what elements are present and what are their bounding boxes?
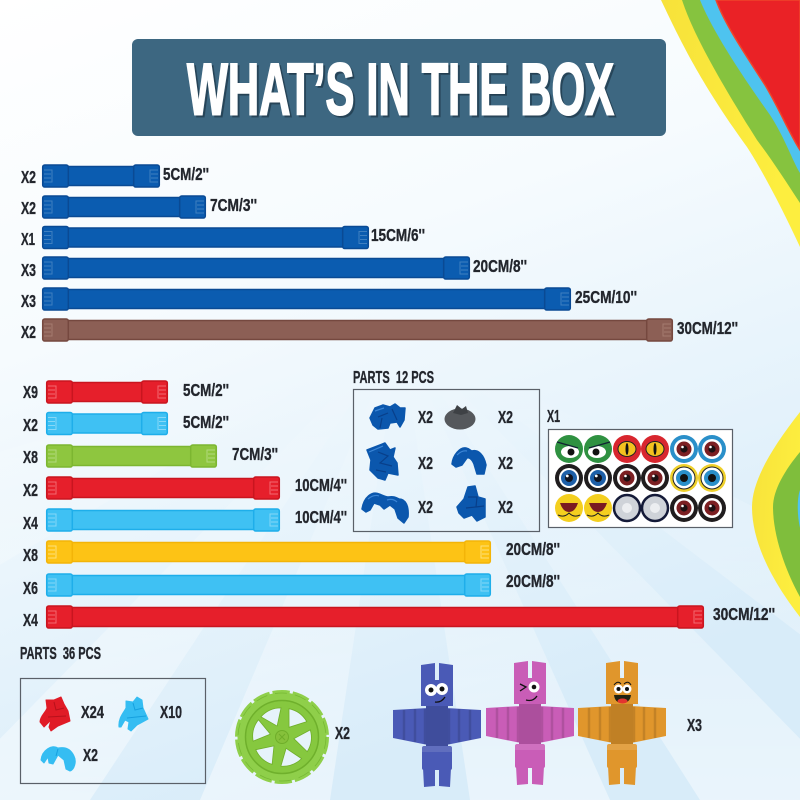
part counts: X2 bbox=[418, 453, 433, 473]
bar row: X1 15cm blue: X1 bbox=[21, 229, 35, 249]
bar row: X3 20cm blue: X3 bbox=[21, 260, 36, 280]
icon: green wheel bbox=[238, 692, 326, 782]
icon: grey round base bbox=[444, 405, 476, 430]
bar row: X9 5cm red: X9 bbox=[23, 382, 38, 402]
bar row: X8 7cm green: 7CM/3'' bbox=[232, 444, 278, 464]
stickers: black ring brown eyes bbox=[670, 494, 726, 522]
bar row: X2 5cm blue: 5CM/2'' bbox=[163, 164, 209, 184]
bar row: X1 15cm blue: 15CM/6'' bbox=[371, 225, 425, 245]
panel: parts 36 pcs bbox=[20, 678, 206, 784]
bar row: X9 5cm red: 5CM/2'' bbox=[183, 380, 229, 400]
bar row: X3 20cm blue bbox=[21, 256, 527, 280]
bar row: X3 25cm blue: X3 bbox=[21, 291, 36, 311]
sticker count: X1 bbox=[547, 406, 560, 426]
stickers: red cat eyes bbox=[613, 435, 669, 463]
figure count: X3 bbox=[687, 715, 702, 735]
bar row: X2 10cm red bbox=[23, 475, 347, 500]
panel: parts 36 pcs: X10 bbox=[160, 702, 182, 722]
part counts: X2 bbox=[498, 407, 513, 427]
icon: blue multi-clip part bbox=[370, 404, 405, 429]
part counts bbox=[418, 407, 513, 517]
panel: parts 12 pcs bbox=[354, 390, 540, 532]
bar row: X2 30cm brown: 30CM/12'' bbox=[677, 318, 738, 338]
bar row: X2 5cm cyan: 5CM/2'' bbox=[183, 412, 229, 432]
stickers: yellow mouths bbox=[555, 494, 612, 522]
heading: parts 12 pcs: PARTS 12 PCS bbox=[353, 367, 434, 387]
stickers: black ring red eyes bbox=[613, 464, 669, 492]
icon: blue double arch bbox=[452, 448, 486, 474]
stickers: blue ring eyes bbox=[670, 435, 726, 463]
bar row: X9 5cm red bbox=[23, 380, 229, 403]
bar row: X8 20cm yellow bbox=[23, 539, 560, 565]
figure: blue robot bbox=[393, 663, 481, 787]
stickers: black ring blue eyes bbox=[555, 464, 612, 492]
stickers: yellow ring blue eyes bbox=[670, 464, 726, 492]
icon: cyan clip bbox=[119, 697, 148, 731]
bar row: X4 10cm cyan: 10CM/4'' bbox=[295, 507, 347, 527]
bar row: X4 10cm cyan bbox=[23, 507, 347, 533]
bar row: X3 25cm blue: 25CM/10'' bbox=[575, 287, 637, 307]
bar row: X2 7cm blue bbox=[21, 195, 257, 218]
bar row: X2 30cm brown bbox=[21, 318, 738, 342]
bar row: X2 30cm brown: X2 bbox=[21, 322, 36, 342]
bar row: X2 5cm cyan bbox=[23, 412, 229, 435]
bar row: X1 15cm blue bbox=[21, 225, 425, 249]
bar row: X8 7cm green bbox=[23, 444, 278, 467]
part counts: X2 bbox=[498, 497, 513, 517]
bar row: X4 30cm red: 30CM/12'' bbox=[713, 604, 775, 624]
panel: parts 36 pcs: X24 bbox=[81, 702, 104, 722]
bar row: X3 25cm blue bbox=[21, 287, 637, 311]
bar row: X2 10cm red: X2 bbox=[23, 480, 38, 500]
bar row: X2 5cm blue: X2 bbox=[21, 167, 36, 187]
title banner bbox=[132, 39, 666, 136]
bar row: X2 5cm blue bbox=[21, 164, 209, 187]
figure: pink robot bbox=[486, 661, 574, 785]
part counts: X2 bbox=[418, 497, 433, 517]
bar row: X2 7cm blue: 7CM/3'' bbox=[210, 195, 257, 215]
bar row: X4 30cm red bbox=[23, 604, 775, 630]
bar row: X3 20cm blue: 20CM/8'' bbox=[473, 256, 527, 276]
icon: blue block part bbox=[367, 443, 398, 480]
bar row: X8 20cm yellow: X8 bbox=[23, 545, 38, 565]
bar row: X2 10cm red: 10CM/4'' bbox=[295, 475, 347, 495]
bar row: X2 5cm cyan: X2 bbox=[23, 415, 38, 435]
bar row: X8 7cm green: X8 bbox=[23, 447, 38, 467]
icon: cyan double arch bbox=[41, 747, 75, 771]
icon: blue clip block bbox=[457, 486, 485, 521]
wheel count: X2 bbox=[335, 723, 350, 743]
part counts: X2 bbox=[498, 453, 513, 473]
bar row: X6 20cm cyan: X6 bbox=[23, 578, 38, 598]
bar row: X6 20cm cyan bbox=[23, 571, 560, 598]
stickers: green angry eyes bbox=[555, 435, 612, 463]
heading: parts 36 pcs: PARTS 36 PCS bbox=[20, 643, 101, 663]
icon: blue triple arch bbox=[362, 493, 408, 523]
bar row: X6 20cm cyan: 20CM/8'' bbox=[506, 571, 560, 591]
bar row: X4 10cm cyan: X4 bbox=[23, 513, 38, 533]
figure: orange robot bbox=[578, 661, 666, 785]
bar row: X2 7cm blue: X2 bbox=[21, 198, 36, 218]
bar row: X4 30cm red: X4 bbox=[23, 610, 38, 630]
decorative wave: right side rainbow bbox=[752, 412, 800, 617]
part counts: X2 bbox=[418, 407, 433, 427]
icon: red clip bbox=[40, 697, 70, 731]
decorative wave: top right rainbow bbox=[661, 0, 800, 247]
panel: parts 36 pcs: X2 bbox=[83, 745, 98, 765]
bar row: X8 20cm yellow: 20CM/8'' bbox=[506, 539, 560, 559]
panel: eye sticker sheet bbox=[548, 430, 732, 528]
stickers: silver discs bbox=[614, 495, 668, 521]
